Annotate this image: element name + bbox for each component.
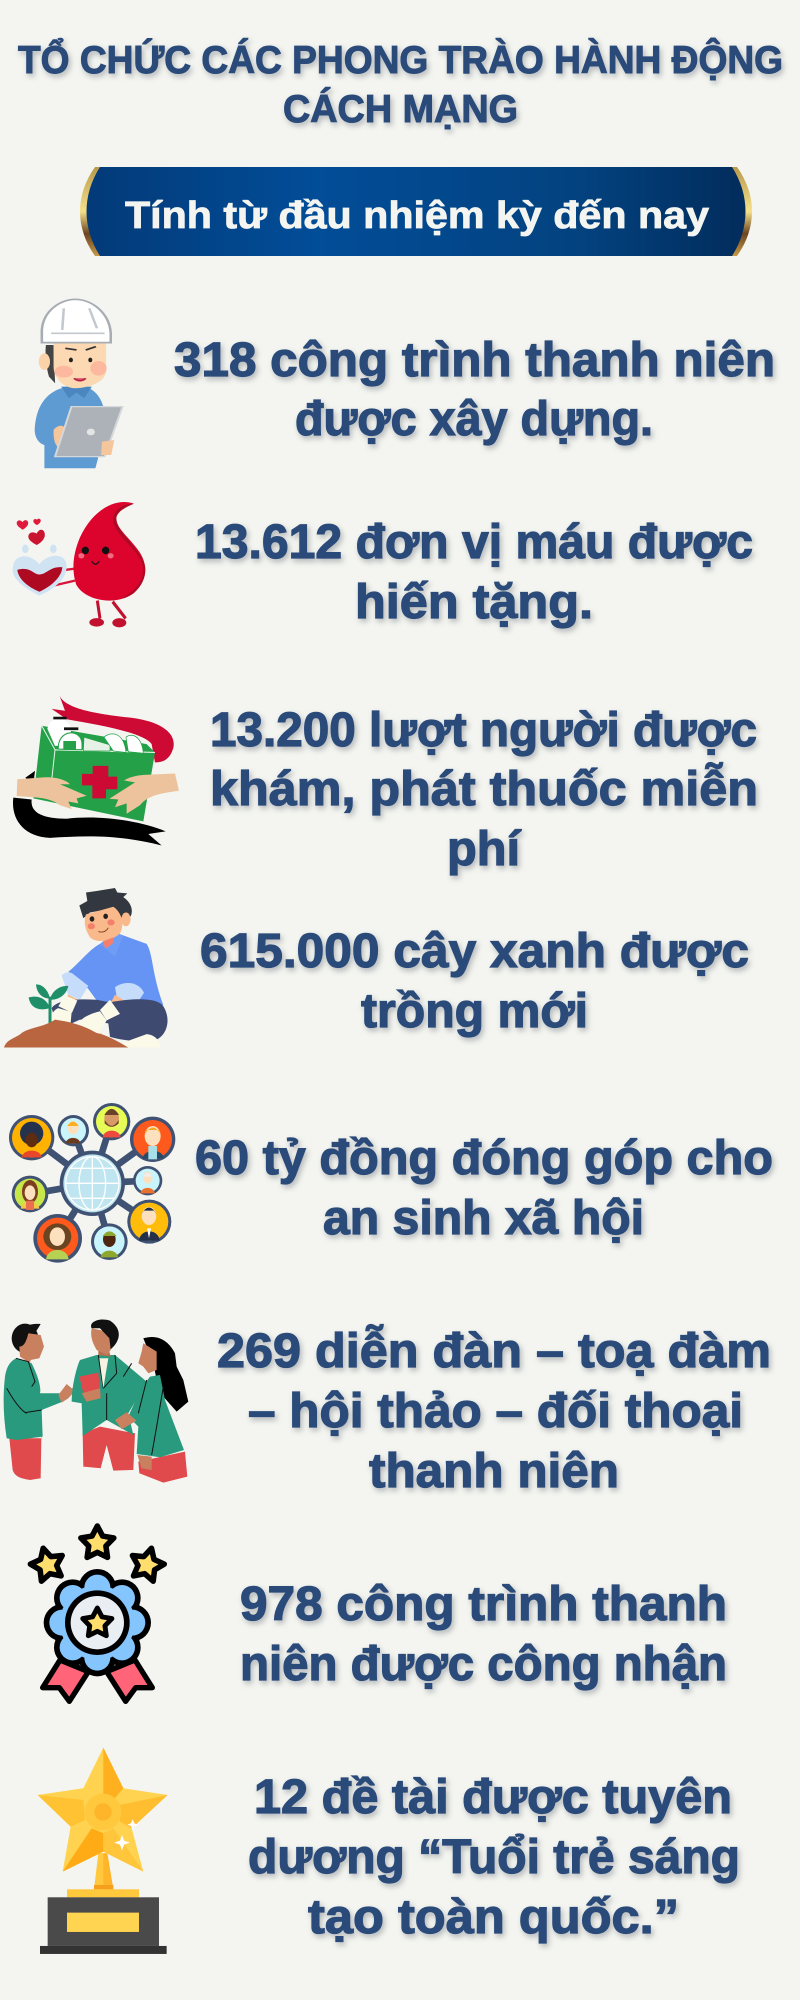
item: youth forums: [4, 1319, 771, 1498]
icon: star trophy: [38, 1748, 168, 1954]
text: recognized projects: 978 công trình thanh: [240, 1578, 727, 1631]
text: youth forums: [217, 1324, 771, 1498]
icon: medal with stars: [27, 1526, 167, 1701]
item: trees planted: [4, 888, 749, 1048]
item: recognized projects: [27, 1526, 727, 1701]
text: blood donation: 13.612 đơn vị máu được: [195, 516, 753, 569]
text: free medical checkups: phí: [447, 823, 522, 876]
icon: blood drop mascot: [13, 502, 145, 627]
text: youth projects: [174, 334, 775, 446]
icon: medical kit held by hands: [13, 695, 179, 845]
text: youth projects: 318 công trình thanh niên: [174, 334, 775, 387]
text: creative youth awards: [248, 1771, 740, 1944]
text: youth forums: thanh niên: [369, 1445, 619, 1498]
text: youth forums: 269 diễn đàn – toạ đàm: [217, 1324, 771, 1378]
item: youth projects: [35, 299, 775, 468]
text: social welfare: an sinh xã hội: [323, 1192, 644, 1245]
item: free medical checkups: [13, 695, 758, 876]
text: free medical checkups: [210, 704, 758, 876]
text: free medical checkups: khám, phát thuốc miễn: [210, 762, 758, 816]
text: trees planted: trồng mới: [361, 985, 588, 1038]
people avatars: [9, 1103, 175, 1263]
icon: engineer with tablet: [35, 299, 122, 468]
icon: person planting a sapling: [4, 888, 168, 1048]
item: social welfare: [9, 1103, 773, 1263]
text: creative youth awards: dương “Tuổi trẻ sáng: [248, 1831, 740, 1884]
text: recognized projects: [240, 1578, 727, 1691]
text: blood donation: [195, 516, 753, 629]
title: [18, 37, 783, 131]
banner: time period: Tính từ đầu nhiệm kỳ đến nay: [125, 195, 709, 237]
text: trees planted: [200, 925, 749, 1038]
text: youth forums: – hội thảo – đối thoại: [248, 1385, 743, 1438]
title: CÁCH MẠNG: [283, 87, 518, 131]
text: creative youth awards: tạo toàn quốc.”: [308, 1891, 679, 1944]
title: TỔ CHỨC CÁC PHONG TRÀO HÀNH ĐỘNG: [18, 37, 783, 82]
text: social welfare: 60 tỷ đồng đóng góp cho: [195, 1132, 773, 1185]
text: social welfare: [195, 1132, 773, 1245]
text: recognized projects: niên được công nhận: [240, 1638, 727, 1691]
text: free medical checkups: 13.200 lượt người được: [210, 704, 757, 757]
text: blood donation: hiến tặng.: [355, 576, 593, 629]
icon: three people talking: [4, 1319, 188, 1483]
text: creative youth awards: 12 đề tài được tuyên: [254, 1771, 732, 1824]
text: trees planted: 615.000 cây xanh được: [200, 925, 749, 978]
item: creative youth awards: [38, 1748, 740, 1954]
text: youth projects: được xây dựng.: [295, 393, 653, 446]
icon: globe network of people: [9, 1103, 175, 1263]
item: blood donation: [13, 502, 753, 629]
banner: time period: [80, 167, 752, 256]
